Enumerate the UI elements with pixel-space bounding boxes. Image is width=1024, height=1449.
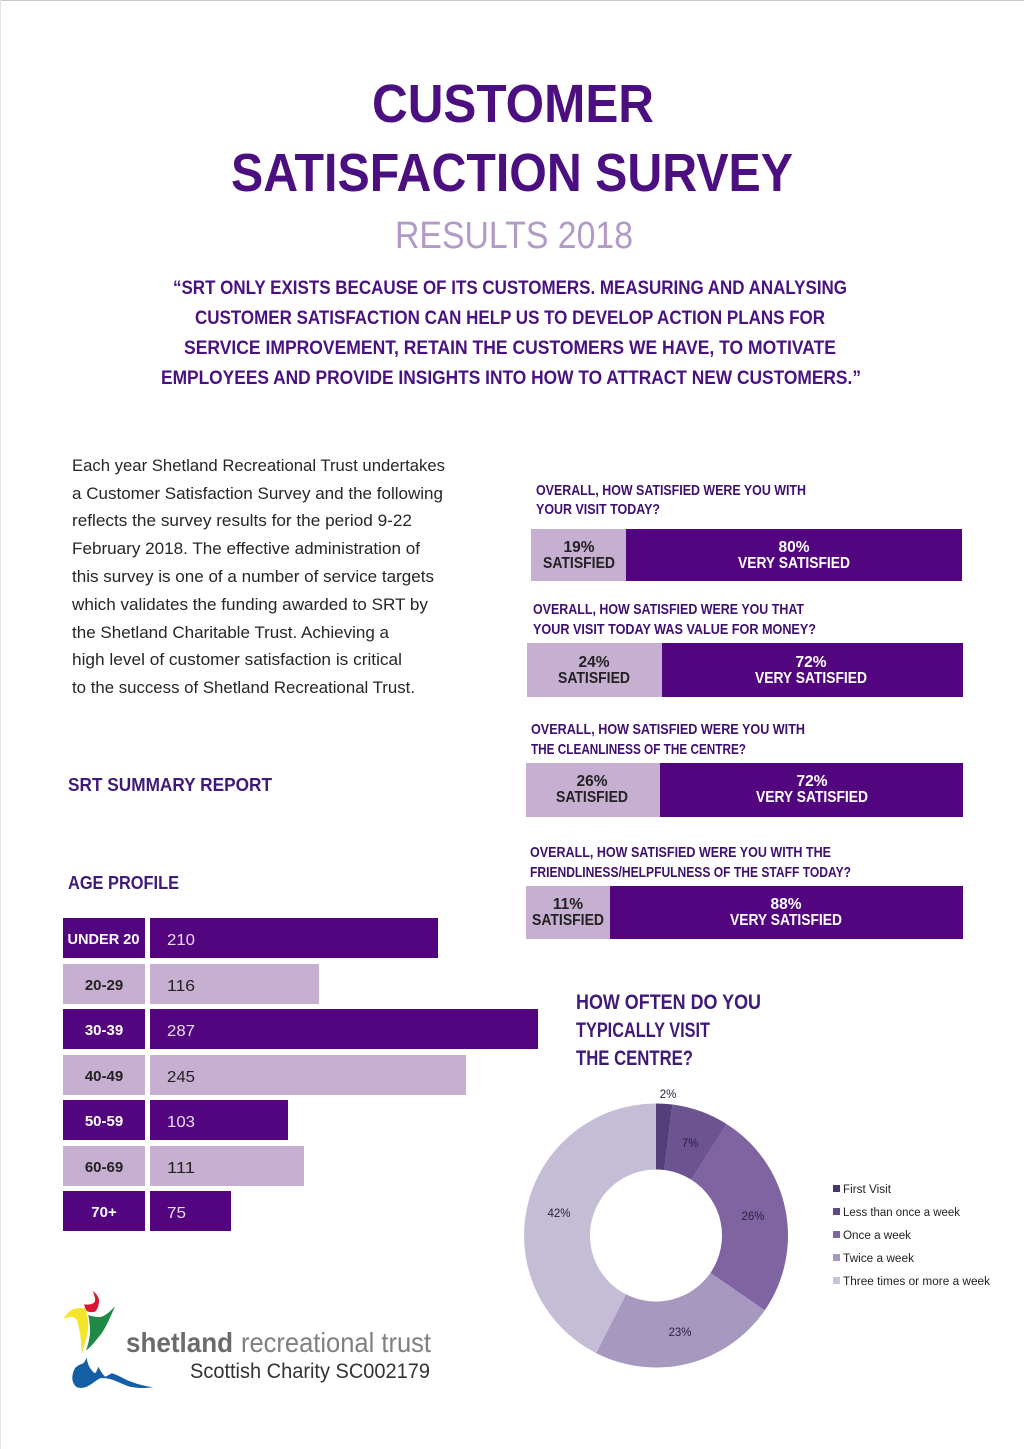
quote text block: SERVICE IMPROVEMENT, RETAIN THE CUSTOMERS WE HAVE, TO MOTIVATE [184,337,836,359]
quote text block: “SRT ONLY EXISTS BECAUSE OF ITS CUSTOMERS. MEASURING AND ANALYSING [173,277,847,299]
result bar: 80% [778,539,810,556]
question text: YOUR VISIT TODAY WAS VALUE FOR MONEY? [533,621,816,638]
title [231,74,793,203]
segment: three times or more 42% [524,1104,656,1353]
question 3: cleanliness [526,721,963,817]
row: 20-29 [63,964,319,1004]
heading: visit frequency: HOW OFTEN DO YOU [576,991,761,1014]
result bar [531,529,962,581]
row: 70+ [63,1191,231,1231]
question 1: visit satisfaction [531,482,962,581]
row: under 20 [63,918,438,958]
intro text block: high level of customer satisfaction is critical [72,650,402,669]
segment: less than once a week 7% [664,1104,727,1180]
question text [531,721,805,758]
row: 60-69: 111 [167,1160,195,1177]
donut legend: Twice a week [843,1253,914,1265]
donut legend: Less than once a week [843,1207,960,1219]
question text [536,482,806,518]
row: 30-39 [63,1009,538,1049]
intro text block: which validates the funding awarded to SRT by [71,595,428,614]
donut legend: Once a week [843,1230,911,1242]
intro text block [71,456,445,697]
row: 40-49: 245 [167,1069,195,1086]
result bar: 88% [770,896,802,913]
intro text block: Each year Shetland Recreational Trust undertakes [72,456,445,475]
result bar: SATISFIED [543,555,615,572]
row: 30-39: 30-39 [85,1022,123,1039]
question text: OVERALL, HOW SATISFIED WERE YOU WITH THE [530,844,831,861]
row: 50-59: 103 [167,1114,195,1131]
percentage labels: 23% [668,1327,692,1339]
quote text block: CUSTOMER SATISFACTION CAN HELP US TO DEVELOP ACTION PLANS FOR [195,307,825,329]
result bar: 72% [796,773,828,790]
donut chart: visit frequency [524,1089,788,1367]
logo: shetland recreational trust [63,1291,431,1388]
heading: summary report: SRT SUMMARY REPORT [68,774,273,795]
intro text block: reflects the survey results for the period 9-22 [72,511,412,530]
row: 20-29: 116 [167,978,195,995]
segment: twice a week 23% [596,1273,765,1367]
donut legend: First Visit [843,1184,892,1196]
result bar: SATISFIED [558,670,630,687]
row: 30-39: 287 [167,1023,195,1040]
intro text block: to the success of Shetland Recreational Trust. [72,678,415,697]
result bar: SATISFIED [532,912,604,929]
row: 60-69 [63,1146,304,1186]
heading: visit frequency: TYPICALLY VISIT [576,1019,710,1042]
row: 40-49 [63,1055,466,1095]
result bar: 11% [553,896,583,913]
row: under 20: UNDER 20 [68,931,140,948]
intro text block: this survey is one of a number of service targets [72,567,434,586]
result bar: VERY SATISFIED [756,789,868,806]
row: 40-49: 40-49 [85,1068,123,1085]
title: SATISFACTION SURVEY [231,143,793,203]
result bar: VERY SATISFIED [730,912,842,929]
question text: OVERALL, HOW SATISFIED WERE YOU THAT [533,601,804,618]
charity number: Scottish Charity SC002179 [190,1360,430,1383]
result bar [526,763,963,817]
logo icon: figure and wave [63,1291,153,1388]
quote text block [161,277,861,389]
question text [533,601,816,638]
segment: first visit 2% [656,1103,672,1170]
result bar: 19% [563,539,595,556]
result bar [526,886,963,939]
row: 60-69: 60-69 [85,1159,123,1176]
row: 70+: 75 [167,1205,186,1222]
question text [530,844,851,881]
question text: OVERALL, HOW SATISFIED WERE YOU WITH [536,482,806,499]
intro text block: February 2018. The effective administration of [72,539,420,558]
result bar [527,643,963,697]
result bar: VERY SATISFIED [738,555,850,572]
result bar: 72% [795,654,827,671]
row: 20-29: 20-29 [85,977,123,994]
row: 50-59 [63,1100,288,1140]
result bar: 24% [578,654,610,671]
segment: once a week 26% [691,1124,788,1310]
title: CUSTOMER [372,74,654,134]
row: 50-59: 50-59 [85,1113,123,1130]
question text: YOUR VISIT TODAY? [536,501,660,518]
percentage labels: 42% [547,1208,571,1220]
result bar: VERY SATISFIED [755,670,867,687]
age profile bar chart [63,918,538,1231]
question 4: staff friendliness [526,844,963,939]
percentage labels [547,1089,765,1339]
row: under 20: 210 [167,932,195,949]
intro text block: a Customer Satisfaction Survey and the following [72,484,443,503]
heading: visit frequency [576,991,761,1070]
logo: shetland recreational trust: recreational trust [241,1327,431,1358]
heading: age profile: AGE PROFILE [68,872,179,893]
question 2: value for money [527,601,963,697]
donut legend: Three times or more a week [843,1276,990,1288]
percentage labels: 7% [682,1138,698,1150]
heading: visit frequency: THE CENTRE? [576,1047,693,1070]
logo wordmark: shetland [126,1327,233,1358]
row: 70+: 70+ [91,1204,117,1221]
question text: THE CLEANLINESS OF THE CENTRE? [531,741,746,758]
subtitle: RESULTS 2018 [395,215,633,257]
question text: OVERALL, HOW SATISFIED WERE YOU WITH [531,721,805,738]
question text: FRIENDLINESS/HELPFULNESS OF THE STAFF TODAY? [530,864,851,881]
result bar: SATISFIED [556,789,628,806]
quote text block: EMPLOYEES AND PROVIDE INSIGHTS INTO HOW TO ATTRACT NEW CUSTOMERS.” [161,367,861,389]
intro text block: the Shetland Charitable Trust. Achieving a [72,623,390,642]
donut legend [833,1184,990,1288]
percentage labels: 2% [660,1089,676,1101]
percentage labels: 26% [741,1211,765,1223]
result bar: 26% [576,773,608,790]
